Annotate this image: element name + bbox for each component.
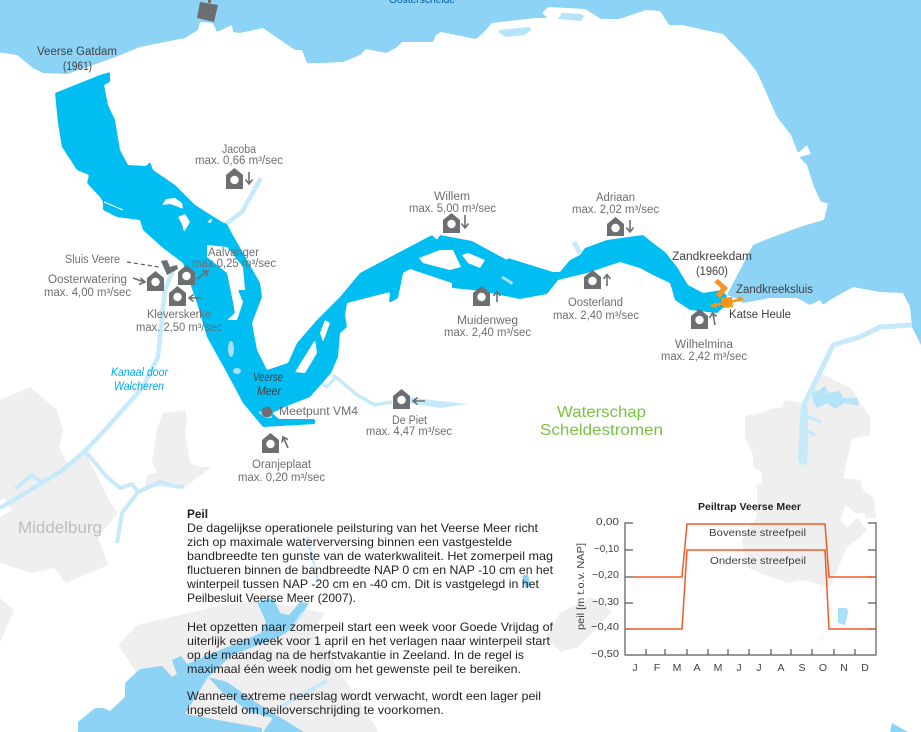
y axis labels: −0,10 <box>594 543 619 555</box>
land area: east <box>742 373 876 587</box>
light water patch north coast west <box>499 27 531 37</box>
station: Muidenweg: Muidenweg <box>457 315 518 327</box>
label: Veerse Gatdam <box>37 46 117 73</box>
label: Zandkreekdam <box>672 251 752 278</box>
text block: Peil: fluctueren binnen de bandbreedte NAP 0 cm en NAP -10 cm en het <box>187 563 554 577</box>
station: Kleverskerke: Kleverskerke <box>147 309 211 321</box>
canal branch <box>85 451 138 543</box>
station: Jacoba: max. 0,66 m³/sec <box>195 155 283 167</box>
label: Veerse Meer: Veerse <box>253 372 283 384</box>
icon: Veerse Gatdam marker <box>197 0 218 22</box>
label: Veerse Meer: Meer <box>257 386 282 398</box>
station: Adriaan: Adriaan <box>596 192 635 204</box>
station: Wilhelmina <box>661 309 747 363</box>
station: Oosterwatering <box>44 271 164 299</box>
text block: Peil: Het opzetten naar zomerpeil start een week voor Goede Vrijdag of <box>187 620 554 634</box>
chart axes and ticks <box>625 523 876 655</box>
land area: Walcheren west <box>0 387 118 583</box>
light ditch channel <box>293 612 303 627</box>
station: Wilhelmina: max. 2,42 m³/sec <box>661 351 747 363</box>
station: Oosterwatering: max. 4,00 m³/sec <box>44 287 131 299</box>
station: Muidenweg: max. 2,40 m³/sec <box>444 327 531 339</box>
station: Wilhelmina: Wilhelmina <box>675 339 734 351</box>
station: Aalvanger: max.0,25 m³/sec <box>192 258 276 270</box>
label: Veerse Meer <box>253 372 283 398</box>
month labels: S <box>798 662 806 674</box>
sea corner bottom right <box>890 723 908 732</box>
De Piet side ditch <box>318 373 335 387</box>
text block: Peil: ingesteld om peiloverschrijding te voorkomen. <box>187 703 444 717</box>
month labels: A <box>777 662 785 674</box>
land area: south centre <box>118 600 379 732</box>
east canal upper <box>820 325 912 372</box>
station: Kleverskerke <box>136 286 222 334</box>
text block: Peil: Peilbesluit Veerse Meer (2007). <box>187 591 356 605</box>
month labels: A <box>693 662 701 674</box>
Veerse Meer lake <box>55 72 727 427</box>
station: Adriaan: max. 2,02 m³/sec <box>572 204 659 216</box>
station: Oranjeplaat <box>238 433 325 484</box>
text block: Peil: maximaal één week nodig om het gewenste peil te bereiken. <box>187 662 521 676</box>
station: Oosterland: Oosterland <box>568 297 623 309</box>
station: De Piet: De Piet <box>392 415 428 427</box>
sea: Oosterschelde <box>0 0 921 365</box>
icon: Sluis Veere <box>161 260 178 275</box>
month labels: J <box>756 662 762 674</box>
station: Oranjeplaat: max. 0,20 m³/sec <box>238 472 325 484</box>
icon: Zandkreeksluis and Katse Heule <box>710 296 744 308</box>
line label: Onderste streefpeil: Onderste streefpeil <box>710 555 806 567</box>
De Piet lower reach <box>408 397 468 408</box>
chart pond <box>838 608 848 625</box>
month labels: J <box>632 662 638 674</box>
month labels: O <box>819 662 827 674</box>
station: Willem: max. 5,00 m³/sec <box>409 203 496 215</box>
canals and tributaries <box>0 178 912 707</box>
land area: behind chart <box>546 597 612 652</box>
line label: Bovenste streefpeil: Bovenste streefpeil <box>709 527 806 539</box>
label: Waterschap Scheldestromen <box>540 404 663 439</box>
east canal docks <box>807 416 821 436</box>
line: Onderste streefpeil <box>625 550 876 629</box>
line: Bovenste streefpeil <box>633 524 876 577</box>
y axis labels: 0,00 <box>596 516 619 528</box>
text block: Peil: De dagelijkse operationele peilsturing van het Veerse Meer richt <box>187 521 539 535</box>
lake water body <box>55 72 727 427</box>
station: Muidenweg <box>444 286 531 339</box>
text block: Peil: bandbreedte ten gunste van de waterkwaliteit. Het zomerpeil mag <box>187 549 553 563</box>
month labels: M <box>714 662 722 674</box>
text block: Peil: zich op maximale waterverversing binnen een vastgestelde <box>187 535 512 549</box>
y axis labels: −0,50 <box>591 648 619 660</box>
station: Oosterland <box>553 270 639 322</box>
station: Oosterland: max. 2,40 m³/sec <box>553 310 639 322</box>
station: De Piet: max. 4,47 m³/sec <box>366 426 452 438</box>
label: Veerse Gatdam: Veerse Gatdam <box>37 46 117 58</box>
label: Zandkreekdam: Zandkreekdam <box>672 251 752 263</box>
y axis labels: −0,30 <box>592 596 619 608</box>
land area: southwest corner <box>0 598 14 643</box>
text block: Peil: winterpeil tussen NAP -20 cm en -40 cm. Dit is vastgelegd in het <box>186 577 540 591</box>
east canal lower <box>798 370 823 465</box>
label: Zandkreekdam: (1960) <box>696 266 728 278</box>
y axis title: peil [m t.o.v. NAP] <box>575 543 587 630</box>
Adriaan stub <box>574 242 580 253</box>
light ditch south <box>280 681 327 707</box>
station: Aalvanger <box>178 247 276 285</box>
heading: Peil: Peil <box>187 507 208 521</box>
y axis labels: −0,40 <box>591 621 619 633</box>
chart title: Peiltrap Veerse Meer <box>698 501 801 513</box>
De Piet watercourse <box>333 375 392 405</box>
station: Adriaan <box>572 192 659 236</box>
month labels <box>632 662 869 674</box>
thin ditch in text block <box>307 537 318 580</box>
y axis labels <box>591 516 619 660</box>
small blue ditch <box>525 575 528 587</box>
station: Willem: Willem <box>434 191 470 203</box>
label: Sluis Veere with leader <box>65 254 159 267</box>
y axis labels: −0,20 <box>592 569 619 581</box>
station: Jacoba <box>195 144 283 189</box>
station: Oosterwatering: Oosterwatering <box>48 274 127 286</box>
label: Kanaal door Walcheren <box>111 367 169 393</box>
Kanaal door Walcheren <box>0 265 175 508</box>
Jacoba watercourse <box>226 178 261 224</box>
pond east <box>812 385 859 409</box>
text block: Peil <box>186 507 554 717</box>
label: Kanaal door Walcheren: Walcheren <box>114 381 164 393</box>
station: De Piet <box>366 389 452 438</box>
month labels: N <box>840 662 848 674</box>
lake islands <box>162 198 485 373</box>
channel south <box>208 677 320 732</box>
label: Zandkreeksluis: Zandkreeksluis <box>736 284 813 296</box>
label: Kanaal door Walcheren: Kanaal door <box>111 367 169 379</box>
label: Katse Heule: Katse Heule <box>729 309 791 321</box>
text block: Peil: op de maandag na de herfstvakantie in Zeeland. In de regel is <box>187 648 524 662</box>
icon: Zandkreekdam <box>714 279 728 298</box>
station: Kleverskerke: max. 2,50 m³/sec <box>136 322 222 334</box>
month labels: J <box>736 662 742 674</box>
month labels: F <box>654 662 660 674</box>
canal side loop <box>15 475 42 489</box>
label: Waterschap Scheldestromen: Waterschap <box>557 404 646 421</box>
station: Oranjeplaat: Oranjeplaat <box>252 459 312 471</box>
label: Middelburg: Middelburg <box>18 518 102 537</box>
label: Sluis Veere with leader: Sluis Veere <box>65 254 120 266</box>
light water patch north coast east <box>558 13 584 21</box>
text block: Peil: Wanneer extreme neerslag wordt verwacht, wordt een lager peil <box>187 689 541 703</box>
label: Waterschap Scheldestromen: Scheldestromen <box>540 422 663 439</box>
text block: Peil: uiterlijk een week voor 1 april en het verlagen naar winterpeil start <box>187 634 551 648</box>
month labels: M <box>673 662 681 674</box>
station: Jacoba: Jacoba <box>222 144 257 156</box>
sea: bottom left water <box>78 598 309 732</box>
white notch at west edge <box>0 498 12 517</box>
shallow patches <box>228 276 513 418</box>
canal branch east <box>138 482 184 492</box>
measuring point VM4: Meetpunt VM4 <box>279 406 359 418</box>
month labels: D <box>861 662 869 674</box>
station: Aalvanger: Aalvanger <box>208 247 259 259</box>
station: Willem <box>409 191 496 233</box>
label: Veerse Gatdam: (1961) <box>63 61 92 73</box>
thin white sand strip <box>104 202 123 210</box>
chart: Peiltrap Veerse Meer <box>575 501 876 674</box>
land area: Middelburg east <box>145 410 212 487</box>
